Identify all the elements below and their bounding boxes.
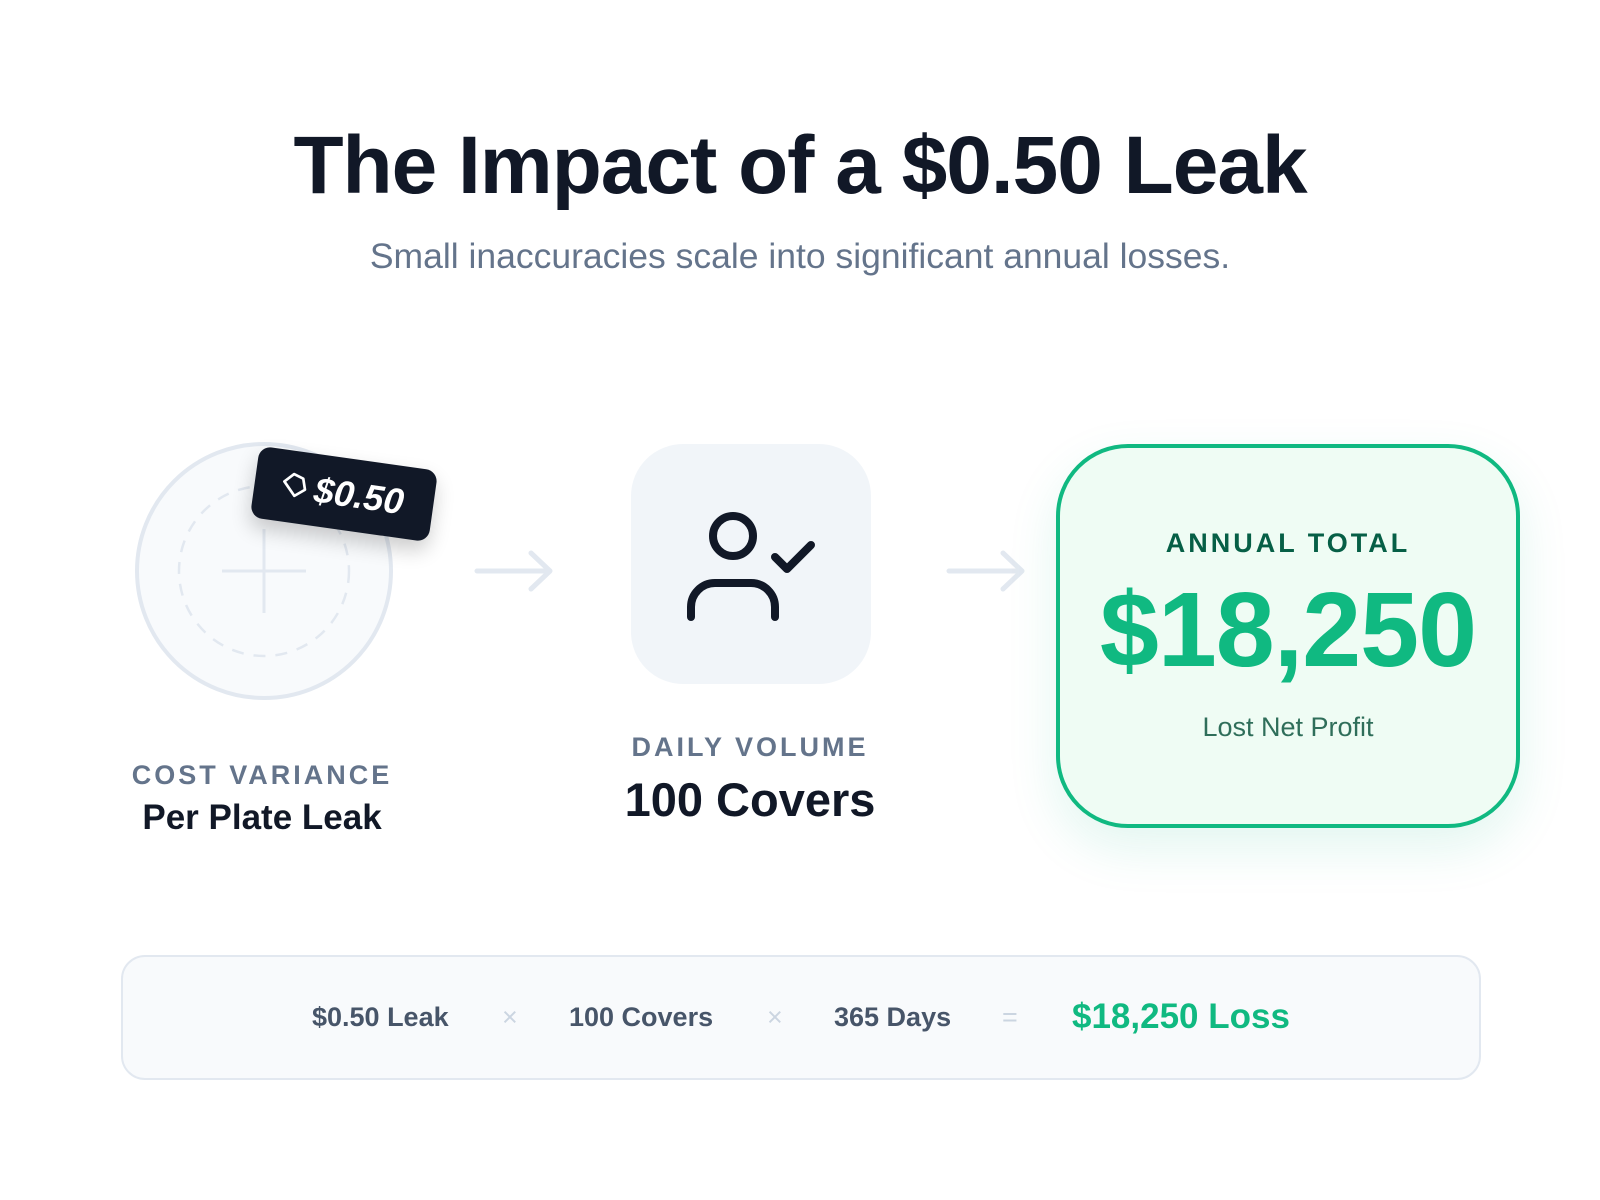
- formula: leak: $0.50 Leak: [312, 1002, 449, 1032]
- icon: person check: [631, 444, 871, 684]
- panel: cost variance: [132, 442, 393, 837]
- label: 100 covers: 100 Covers: [625, 773, 875, 826]
- panel: daily volume: [625, 444, 875, 826]
- subtitle: Small inaccuracies scale into significant annual losses.: [370, 236, 1230, 276]
- label: daily volume: DAILY VOLUME: [631, 732, 869, 762]
- arrow 1: [474, 550, 552, 592]
- formula: times: ×: [502, 1002, 518, 1032]
- arrow 2: [946, 550, 1024, 592]
- formula bar: [121, 955, 1481, 1080]
- icon: plate: [135, 442, 393, 700]
- icon: tag: [283, 472, 306, 498]
- title: The Impact of a $0.50 Leak: [293, 120, 1307, 211]
- formula: times: ×: [767, 1002, 783, 1032]
- formula: days: 365 Days: [834, 1002, 951, 1032]
- formula: result: $18,250 Loss: [1072, 997, 1290, 1036]
- formula: equals: =: [1002, 1002, 1018, 1032]
- label: annual total: ANNUAL TOTAL: [1166, 528, 1410, 558]
- price tag: [250, 446, 438, 542]
- label: per plate leak: Per Plate Leak: [142, 798, 382, 837]
- big number: $18,250: [1100, 571, 1476, 689]
- label: cost variance: COST VARIANCE: [132, 760, 392, 790]
- panel: annual total: [1056, 444, 1520, 828]
- label: lost net profit: Lost Net Profit: [1202, 712, 1374, 742]
- formula: covers: 100 Covers: [569, 1002, 713, 1032]
- price tag: $0.50: [312, 469, 406, 522]
